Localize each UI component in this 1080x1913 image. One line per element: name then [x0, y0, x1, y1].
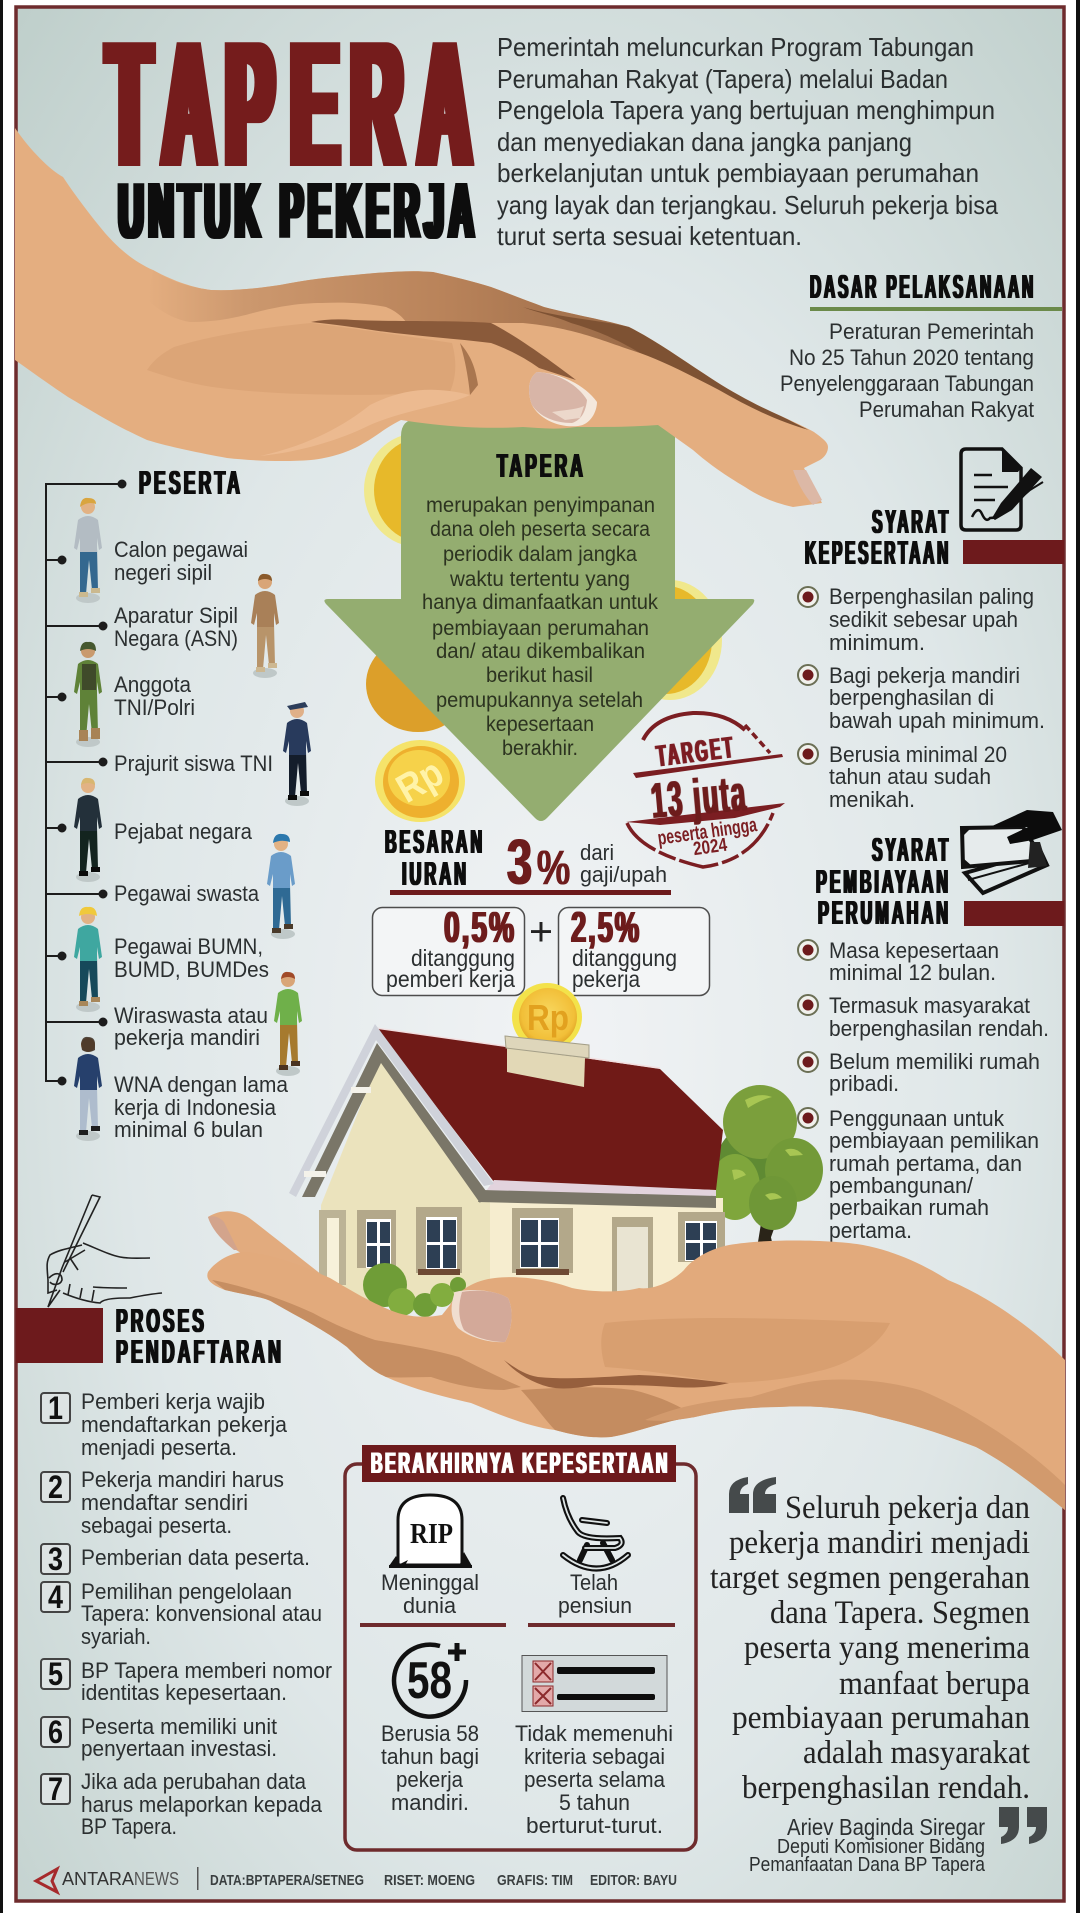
panel: syarat kepesertaan: SYARAT	[872, 503, 951, 540]
green arrow	[324, 419, 754, 821]
heading	[362, 1445, 676, 1482]
quote: pembiayaan perumahan	[732, 1700, 1030, 1736]
chimney	[507, 1048, 585, 1087]
stamp: target 13 juta: 2024	[692, 835, 729, 860]
arrow text: merupakan penyimpanan	[426, 493, 655, 517]
window	[357, 1210, 396, 1268]
eaves	[486, 1180, 716, 1196]
icon: person prajurit	[283, 702, 311, 806]
quote: berpenghasilan rendah.	[742, 1770, 1030, 1806]
panel: berakhirnya kepesertaan: tahun bagi	[381, 1744, 479, 1769]
steps text: Pekerja mandiri harus	[81, 1467, 284, 1492]
icon: person calon pegawai	[74, 498, 102, 603]
attribution: Deputi Komisioner Bidang	[777, 1836, 985, 1858]
quote: peserta yang menerima	[744, 1630, 1030, 1666]
list text: rumah pertama, dan	[829, 1151, 1022, 1176]
list text: Masa kepesertaan	[829, 938, 999, 963]
steps text: menjadi peserta.	[81, 1435, 237, 1460]
shading: palm crease	[311, 319, 576, 380]
shading: palm fold	[601, 1318, 890, 1383]
steps text: syariah.	[81, 1624, 151, 1649]
labels: TNI/Polri	[114, 695, 195, 720]
text: peraturan pemerintah: No 25 Tahun 2020 tentang	[789, 345, 1034, 370]
steps text: Jika ada perubahan data	[81, 1769, 306, 1794]
icon: thumb nail	[452, 1290, 512, 1342]
shading: under thumb	[260, 390, 470, 456]
shading: palm	[147, 323, 455, 395]
steps text: Pemberian data peserta.	[81, 1545, 310, 1570]
arrow text	[422, 447, 658, 760]
list text: Berusia minimal 20	[829, 742, 1007, 767]
steps text: harus melaporkan kepada	[81, 1792, 322, 1817]
box: pekerja: ditanggung	[572, 945, 677, 971]
quote: dana Tapera. Segmen	[770, 1595, 1030, 1631]
attribution: Pemanfaatan Dana BP Tapera	[749, 1854, 986, 1876]
labels: pekerja mandiri	[114, 1025, 260, 1050]
attribution: Ariev Baginda Siregar	[787, 1814, 985, 1840]
text: peraturan pemerintah	[780, 319, 1035, 422]
labels: Pegawai swasta	[114, 881, 259, 906]
panel: berakhirnya kepesertaan: dunia	[403, 1593, 456, 1618]
icon: tombstone: RIP	[410, 1519, 453, 1550]
labels: kerja di Indonesia	[114, 1095, 276, 1120]
panel: besaran iuran: IURAN	[402, 855, 469, 892]
quote: Seluruh pekerja dan	[785, 1490, 1030, 1526]
roof	[376, 1028, 723, 1190]
arrow text: berikut hasil	[486, 663, 593, 687]
heading	[16, 1308, 103, 1363]
list text	[829, 584, 1045, 812]
icon: checklist	[522, 1656, 667, 1712]
box: pemberi kerja: 0,5%	[444, 903, 516, 952]
labels: Aparatur Sipil	[114, 603, 238, 628]
quote: target segmen pengerahan	[710, 1560, 1030, 1596]
panel: berakhirnya kepesertaan: Berusia 58	[381, 1721, 479, 1746]
steps text: identitas kepesertaan.	[81, 1680, 287, 1705]
steps text: Pemilihan pengelolaan	[81, 1579, 292, 1604]
box: pemberi kerja: ditanggung	[411, 945, 515, 971]
icon: person swasta	[267, 834, 295, 939]
steps text: Peserta memiliki unit	[81, 1714, 278, 1739]
icon: closing quote mark	[999, 1807, 1047, 1844]
icon: person ASN	[251, 574, 279, 678]
panel: berakhirnya kepesertaan: kriteria sebagai	[524, 1744, 665, 1769]
quote: pekerja mandiri menjadi	[729, 1525, 1030, 1561]
lower finger nail	[793, 470, 822, 505]
icon: coin on chimney	[512, 983, 582, 1051]
numbers: 4	[48, 1579, 63, 1615]
intro text: yang layak dan terjangkau. Seluruh pekerja bisa	[497, 190, 998, 220]
labels: Calon pegawai	[114, 537, 248, 562]
intro text: Pengelola Tapera yang bertujuan menghimpun	[497, 95, 995, 125]
numbers: 6	[48, 1714, 63, 1750]
labels: Pejabat negara	[114, 819, 252, 844]
panel: proses pendaftaran: PROSES	[116, 1302, 207, 1339]
panel: berakhirnya kepesertaan: 5 tahun	[559, 1790, 630, 1815]
labels: negeri sipil	[114, 560, 212, 585]
box: pemberi kerja	[372, 903, 524, 996]
3 percent: 3	[507, 826, 532, 898]
text: UNTUK PEKERJA	[118, 166, 479, 255]
list text: tahun atau sudah	[829, 764, 991, 789]
labels: Negara (ASN)	[114, 626, 238, 651]
quote: manfaat berupa	[839, 1666, 1030, 1702]
arrow text: waktu tertentu yang	[449, 567, 630, 591]
panel: berakhirnya kepesertaan: peserta selama	[524, 1767, 665, 1792]
steps text: Pemberi kerja wajib	[81, 1389, 265, 1414]
bullets	[798, 587, 818, 764]
intro text: berkelanjutan untuk pembiayaan perumahan	[497, 158, 979, 188]
list text: bawah upah minimum.	[829, 708, 1045, 733]
labels: WNA dengan lama	[114, 1072, 288, 1097]
panel: besaran iuran	[372, 823, 710, 996]
panel: berakhirnya kepesertaan: Tidak memenuhi	[515, 1721, 673, 1746]
labels: Wiraswasta atau	[114, 1003, 268, 1028]
panel: besaran iuran: gaji/upah	[580, 862, 667, 887]
box: pekerja: pekerja	[572, 966, 640, 992]
walls	[478, 1198, 723, 1300]
text: peraturan pemerintah: Perumahan Rakyat	[859, 397, 1035, 422]
icon: Rp coin	[375, 740, 465, 822]
shading: finger ridge	[523, 307, 809, 430]
list text: perbaikan rumah	[829, 1195, 989, 1220]
footer credits: RISET: MOENG	[384, 1872, 475, 1889]
house	[289, 1024, 725, 1300]
steps text: mendaftarkan pekerja	[81, 1412, 287, 1437]
text: peraturan pemerintah: Penyelenggaraan Tabungan	[780, 371, 1034, 396]
shading: finger underside	[212, 1280, 521, 1390]
numbers	[48, 1390, 63, 1807]
quote	[710, 1477, 1047, 1844]
icon: coin on chimney: Rp	[527, 997, 569, 1038]
arrow text: TAPERA	[497, 447, 586, 484]
steps text: BP Tapera memberi nomor	[81, 1658, 332, 1683]
panel: berakhirnya kepesertaan: Meninggal	[381, 1570, 479, 1595]
list text: Bagi pekerja mandiri	[829, 663, 1020, 688]
panel: proses pendaftaran: PENDAFTARAN	[116, 1333, 284, 1370]
logo: antara news: ANTARA	[62, 1869, 134, 1889]
panel: proses pendaftaran	[16, 1302, 332, 1839]
labels: Pegawai BUMN,	[114, 934, 263, 959]
arrow text: hanya dimanfaatkan untuk	[422, 590, 658, 614]
arrow text: pembiayaan perumahan	[432, 616, 649, 640]
post	[319, 1210, 346, 1285]
icon: hand holding money	[962, 810, 1062, 893]
panel: syarat pembiayaan perumahan: SYARAT	[872, 831, 951, 868]
icon: document and pen	[961, 449, 1043, 530]
arrow text: dana oleh peserta secara	[430, 517, 650, 541]
icon: 58 plus	[394, 1643, 466, 1717]
list text: menikah.	[829, 787, 915, 812]
list text: sedikit sebesar upah	[829, 607, 1018, 632]
connector tree	[46, 480, 126, 1085]
numbers: 3	[48, 1541, 63, 1577]
panel: berakhirnya kepesertaan: pensiun	[558, 1593, 632, 1618]
numbers: 7	[48, 1771, 63, 1807]
labels: minimal 6 bulan	[114, 1117, 263, 1142]
list text: Termasuk masyarakat	[829, 993, 1031, 1018]
plus sign: +	[529, 910, 553, 954]
intro text: Perumahan Rakyat (Tapera) melalui Badan	[497, 64, 948, 94]
list text: pertama.	[829, 1218, 912, 1243]
upper finger with nail	[208, 1211, 335, 1285]
panel: berakhirnya kepesertaan: Telah	[570, 1570, 618, 1595]
intro text: Pemerintah meluncurkan Program Tabungan	[497, 32, 974, 62]
panel: besaran iuran: BESARAN	[385, 823, 485, 860]
footer credits	[36, 1867, 677, 1892]
labels: Anggota	[114, 672, 191, 697]
title: TAPERA	[108, 5, 470, 203]
steps text: BP Tapera.	[81, 1814, 177, 1839]
shading: palm crease	[504, 1360, 729, 1388]
list text: pembangunan/	[829, 1173, 974, 1198]
list text	[829, 938, 1049, 1243]
list text: Berpenghasilan paling	[829, 584, 1034, 609]
steps text: mendaftar sendiri	[81, 1490, 248, 1515]
shading: wrist band	[147, 270, 640, 353]
numbers: 5	[48, 1656, 63, 1692]
labels: Prajurit siswa TNI	[114, 751, 273, 776]
logo: antara news	[36, 1869, 179, 1892]
icon: rocking chair	[563, 1498, 628, 1568]
icon: thumb nail	[529, 372, 597, 426]
panel: peserta	[46, 464, 311, 1142]
panel: berakhirnya kepesertaan: mandiri.	[391, 1790, 469, 1815]
numbers: 1	[48, 1390, 63, 1426]
number boxes	[41, 1393, 70, 1804]
stamp: target 13 juta: TARGET	[655, 729, 737, 774]
stamp: target 13 juta: peserta hingga	[656, 814, 759, 850]
icon: person soldier	[74, 642, 102, 747]
icon: Rp coin: Rp	[389, 750, 451, 812]
footer credits: GRAFIS: TIM	[497, 1872, 573, 1889]
coins behind arrow	[364, 433, 722, 732]
quote: adalah masyarakat	[803, 1735, 1030, 1771]
icon: person WNA	[74, 1037, 102, 1141]
text: peraturan pemerintah: Peraturan Pemerintah	[829, 319, 1034, 344]
steps text: sebagai peserta.	[81, 1513, 232, 1538]
door	[612, 1217, 653, 1297]
icon: tree	[710, 1085, 823, 1242]
lower hand	[207, 1211, 1065, 1510]
list text: berpenghasilan rendah.	[829, 1016, 1049, 1041]
icon: tombstone	[389, 1495, 472, 1568]
panel: besaran iuran: %	[537, 842, 570, 895]
panel: syarat pembiayaan perumahan: PERUMAHAN	[818, 894, 951, 931]
list text: pribadi.	[829, 1071, 899, 1096]
steps text: penyertaan investasi.	[81, 1736, 277, 1761]
shading: lower palm	[521, 1387, 695, 1437]
list text: pembiayaan pemilikan	[829, 1128, 1039, 1153]
steps text: Tapera: konvensional atau	[81, 1601, 322, 1626]
icon: hand writing	[47, 1195, 162, 1307]
list text: Penggunaan untuk	[829, 1106, 1005, 1131]
intro text	[497, 32, 998, 251]
window	[678, 1212, 725, 1262]
box: pekerja: 2,5%	[571, 903, 641, 952]
stamp: target 13 juta: 13 juta	[649, 765, 749, 829]
stamp: target 13 juta	[626, 713, 785, 867]
list text: Belum memiliki rumah	[829, 1049, 1040, 1074]
bullets	[798, 940, 818, 1128]
arrow text: pemupukannya setelah	[436, 688, 643, 712]
arrow text: kepesertaan	[486, 712, 594, 736]
heading: peserta: PESERTA	[139, 464, 243, 501]
panel: syarat kepesertaan	[798, 449, 1064, 812]
numbers: 2	[48, 1469, 63, 1505]
icon: 58 plus: 58	[407, 1652, 452, 1710]
upper hand	[15, 128, 828, 507]
labels	[114, 537, 288, 1142]
list text: minimum.	[829, 630, 925, 655]
intro text: dan menyediakan dana jangka panjang	[497, 127, 912, 157]
window	[416, 1207, 462, 1275]
intro text: turut serta sesuai ketentuan.	[497, 221, 802, 251]
icon: person BUMN	[74, 907, 102, 1012]
box: pekerja	[558, 903, 710, 996]
icon: bushes	[363, 1263, 466, 1317]
labels: BUMD, BUMDes	[114, 957, 269, 982]
logo: antara news: NEWS	[134, 1869, 179, 1889]
panel: syarat pembiayaan perumahan	[798, 810, 1064, 1243]
panel: berakhirnya kepesertaan: berturut-turut.	[526, 1813, 663, 1838]
footer credits: EDITOR: BAYU	[590, 1872, 677, 1889]
steps text	[81, 1389, 332, 1839]
icon: opening quote mark	[729, 1477, 776, 1513]
arrow text: berakhir.	[502, 736, 578, 760]
attribution	[749, 1814, 986, 1876]
icon: person pejabat	[74, 778, 102, 882]
list text: minimal 12 bulan.	[829, 960, 996, 985]
icon: person wiraswasta	[274, 972, 302, 1076]
panel: besaran iuran: dari	[580, 840, 614, 865]
arrow text: dan/ atau dikembalikan	[436, 639, 645, 663]
panel: berakhirnya kepesertaan: BERAKHIRNYA KEPESERTAAN	[371, 1447, 670, 1480]
panel: berakhirnya kepesertaan: pekerja	[396, 1767, 463, 1792]
panel: berakhirnya kepesertaan	[345, 1445, 696, 1850]
footer credits: DATA:BPTAPERA/SETNEG	[210, 1872, 364, 1889]
box: pemberi kerja: pemberi kerja	[386, 966, 515, 992]
window	[512, 1208, 573, 1275]
list text: berpenghasilan di	[829, 685, 994, 710]
arrow text: periodik dalam jangka	[443, 542, 637, 566]
